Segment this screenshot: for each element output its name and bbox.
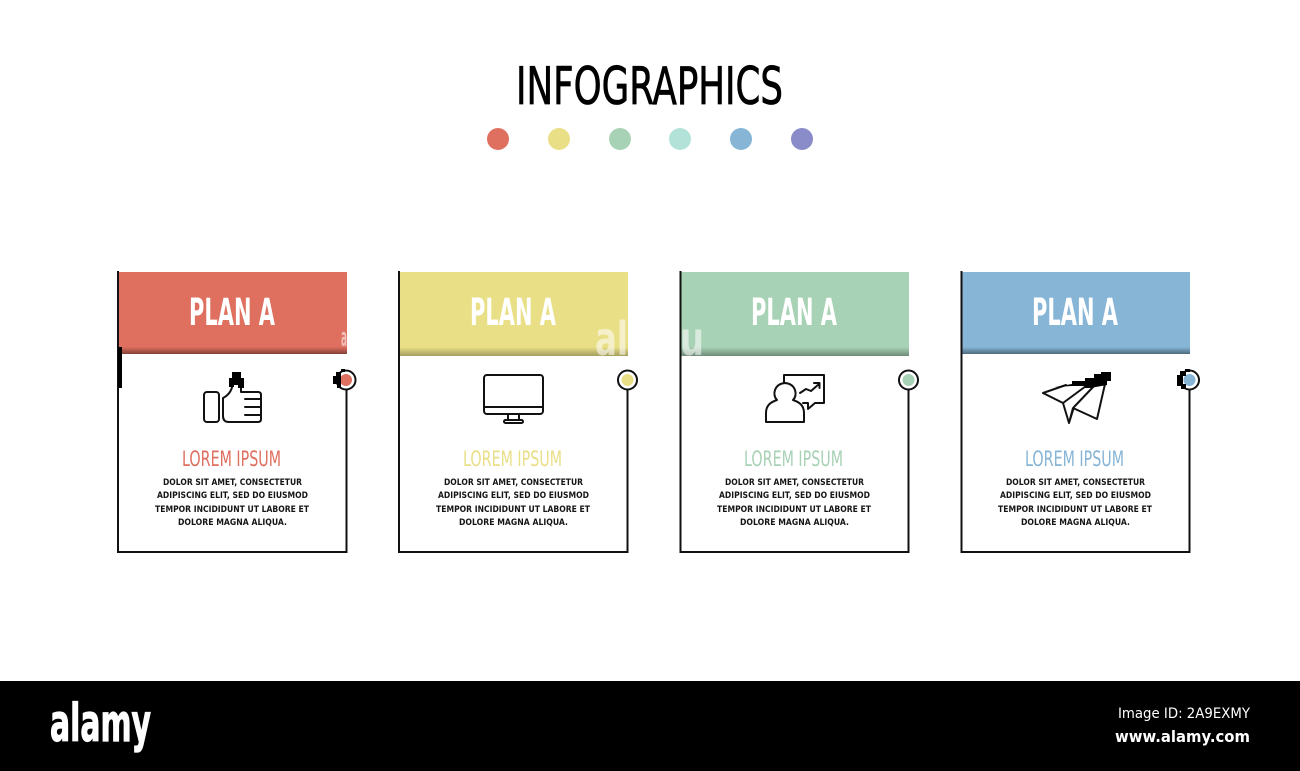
card body text: TEMPOR INCIDIDUNT UT LABORE ET (155, 505, 310, 515)
card body text: DOLOR SIT AMET, CONSECTETUR (725, 478, 864, 488)
card body text: ADIPISCING ELIT, SED DO EIUSMOD (1000, 491, 1151, 501)
icon: presenter with chart bubble (766, 375, 824, 422)
icon: desktop monitor (484, 375, 543, 423)
connector node (618, 370, 637, 390)
card body text: ADIPISCING ELIT, SED DO EIUSMOD (438, 491, 589, 501)
icon: thumbs up (204, 372, 261, 422)
card subheading: LOREM IPSUM (182, 447, 281, 471)
card header band (399, 272, 628, 356)
card body text: DOLORE MAGNA ALIQUA. (740, 518, 849, 528)
card body text (155, 478, 310, 528)
card body text: ADIPISCING ELIT, SED DO EIUSMOD (157, 491, 308, 501)
card outline (680, 271, 908, 552)
panel: plan card blue (961, 271, 1199, 552)
card body text (998, 478, 1153, 528)
connector node (333, 369, 356, 390)
card subheading: LOREM IPSUM (744, 447, 843, 471)
watermark fragments (341, 312, 704, 366)
card subheading: LOREM IPSUM (463, 447, 562, 471)
card header band (961, 272, 1190, 354)
card body text: DOLOR SIT AMET, CONSECTETUR (163, 478, 302, 488)
watermark fragments: a (341, 323, 347, 353)
icon: paper plane (1043, 372, 1111, 423)
connector node (1177, 369, 1199, 390)
panel: plan card yellow (399, 271, 637, 552)
card body text (436, 478, 591, 528)
card header band (680, 272, 909, 356)
connector node (899, 370, 918, 390)
card body text: ADIPISCING ELIT, SED DO EIUSMOD (719, 491, 870, 501)
card body text: TEMPOR INCIDIDUNT UT LABORE ET (998, 505, 1153, 515)
panel: plan card red (118, 271, 356, 552)
colour dots row (487, 128, 813, 150)
card body text (717, 478, 872, 528)
image id: Image ID: 2A9EXMY (1118, 706, 1250, 722)
website: www.alamy.com (1115, 727, 1250, 746)
watermark fragments: u (680, 312, 704, 366)
card outline (399, 271, 628, 552)
card header band (118, 272, 347, 354)
card heading: PLAN A (751, 291, 837, 334)
card body text: DOLOR SIT AMET, CONSECTETUR (1006, 478, 1145, 488)
card body text: DOLORE MAGNA ALIQUA. (178, 518, 287, 528)
card body text: TEMPOR INCIDIDUNT UT LABORE ET (717, 505, 872, 515)
card subheading: LOREM IPSUM (1025, 447, 1124, 471)
card body text: DOLORE MAGNA ALIQUA. (1021, 518, 1130, 528)
footer bar (0, 681, 1300, 771)
card heading: PLAN A (1032, 291, 1118, 334)
card outline (118, 271, 346, 552)
card body text: DOLORE MAGNA ALIQUA. (459, 518, 568, 528)
card heading: PLAN A (470, 291, 556, 334)
panel: plan card green (680, 271, 918, 552)
watermark fragments: al (595, 312, 628, 366)
card body text: DOLOR SIT AMET, CONSECTETUR (444, 478, 583, 488)
title: INFOGRAPHICS (516, 57, 783, 117)
card body text: TEMPOR INCIDIDUNT UT LABORE ET (436, 505, 591, 515)
card heading: PLAN A (189, 291, 275, 334)
left edge marker (118, 347, 122, 388)
card outline (962, 271, 1190, 552)
footer logo: alamy (50, 694, 151, 754)
